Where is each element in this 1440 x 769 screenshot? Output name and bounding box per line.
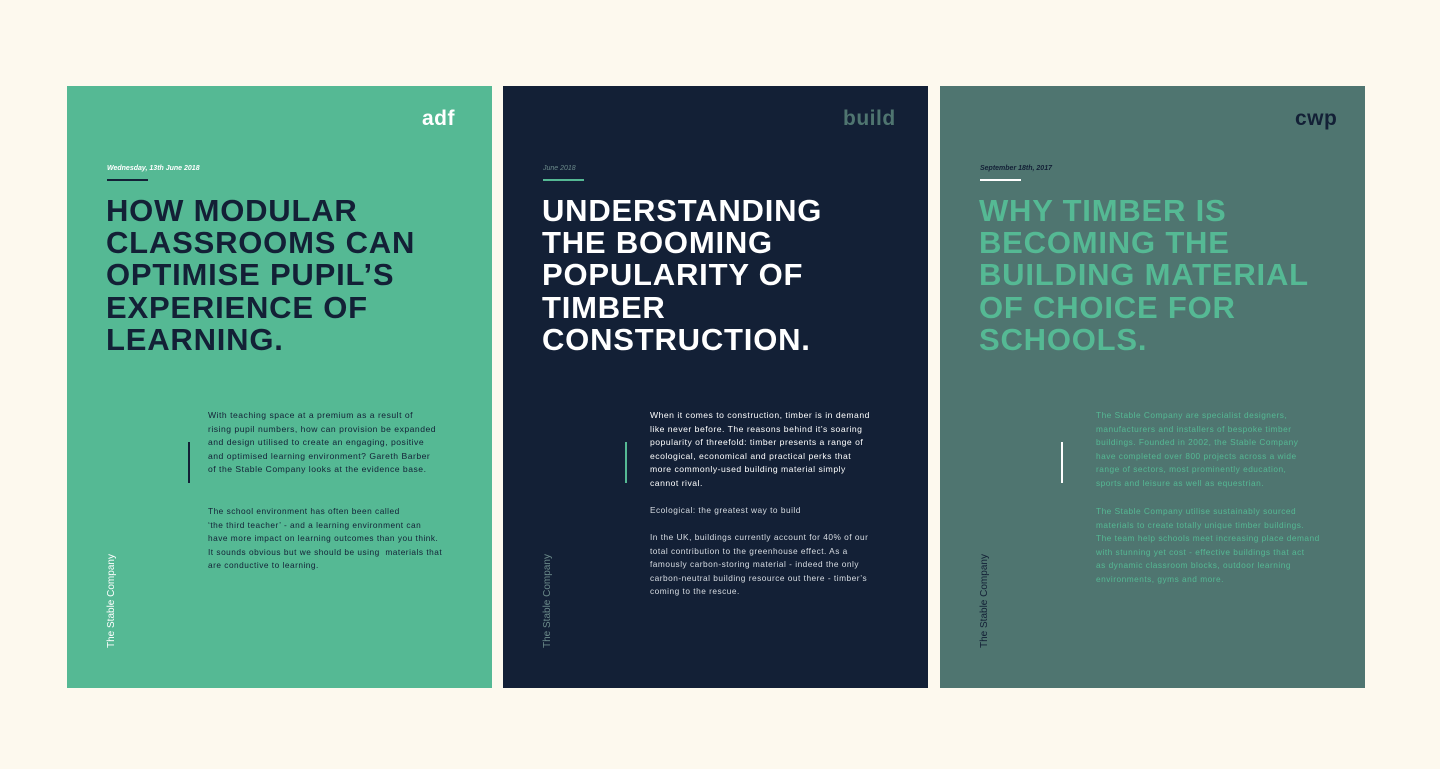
intro text: range of sectors, most prominently education, bbox=[1096, 464, 1286, 474]
title: POPULARITY OF bbox=[542, 257, 803, 292]
body text bbox=[1096, 506, 1320, 584]
accent bar bbox=[1061, 442, 1063, 483]
body text: carbon-neutral building resource out there - timber’s bbox=[650, 573, 867, 583]
intro text: of the Stable Company looks at the evidence base. bbox=[208, 464, 426, 474]
body text: have more impact on learning outcomes than you think. bbox=[208, 533, 438, 543]
title: OPTIMISE PUPIL’S bbox=[106, 257, 394, 292]
subheading: Ecological: the greatest way to build bbox=[650, 505, 801, 515]
body text: as dynamic classroom blocks, outdoor learning bbox=[1096, 560, 1291, 570]
title bbox=[979, 193, 1309, 357]
title: BUILDING MATERIAL bbox=[979, 257, 1309, 292]
date: Wednesday, 13th June 2018 bbox=[107, 165, 200, 172]
intro text: have completed over 800 projects across a wide bbox=[1096, 451, 1297, 461]
title: LEARNING. bbox=[106, 322, 284, 357]
body text: famously carbon-storing material - indeed the only bbox=[650, 559, 859, 569]
intro text: With teaching space at a premium as a result of bbox=[208, 410, 413, 420]
vertical label: The Stable Company bbox=[106, 554, 117, 648]
intro text: manufacturers and installers of bespoke timber bbox=[1096, 424, 1291, 434]
title bbox=[106, 193, 415, 357]
body text: In the UK, buildings currently account for 40% of our bbox=[650, 532, 868, 542]
title: WHY TIMBER IS bbox=[979, 193, 1227, 228]
intro text: cannot rival. bbox=[650, 478, 703, 488]
title: TIMBER bbox=[542, 290, 666, 325]
panel: cwp bbox=[940, 86, 1365, 688]
intro text bbox=[1096, 410, 1298, 488]
body text: environments, gyms and more. bbox=[1096, 574, 1224, 584]
panel: adf bbox=[67, 86, 492, 688]
body text: materials to create totally unique timber buildings. bbox=[1096, 520, 1304, 530]
title: THE BOOMING bbox=[542, 225, 773, 260]
title: CONSTRUCTION. bbox=[542, 322, 811, 357]
intro text: sports and leisure as well as equestrian. bbox=[1096, 478, 1264, 488]
accent bar bbox=[625, 442, 627, 483]
body text bbox=[208, 506, 442, 570]
title: OF CHOICE FOR bbox=[979, 290, 1236, 325]
body text: with stunning yet cost - effective buildings that act bbox=[1096, 547, 1305, 557]
intro text: like never before. The reasons behind it’s soaring bbox=[650, 424, 862, 434]
intro text: buildings. Founded in 2002, the Stable Company bbox=[1096, 437, 1298, 447]
date: June 2018 bbox=[543, 165, 576, 172]
title bbox=[542, 193, 822, 357]
logo: adf: adf bbox=[422, 107, 455, 130]
intro text: popularity of threefold: timber presents a range of bbox=[650, 437, 863, 447]
body text: The Stable Company utilise sustainably sourced bbox=[1096, 506, 1296, 516]
logo: cwp: cwp bbox=[1295, 107, 1337, 130]
title: SCHOOLS. bbox=[979, 322, 1147, 357]
logo: build: build bbox=[843, 107, 896, 130]
date: September 18th, 2017 bbox=[980, 165, 1052, 172]
body text bbox=[650, 532, 868, 596]
body text: are conductive to learning. bbox=[208, 560, 319, 570]
title: UNDERSTANDING bbox=[542, 193, 822, 228]
accent bar bbox=[188, 442, 190, 483]
intro text: more commonly-used building material simply bbox=[650, 464, 846, 474]
body text: The school environment has often been called bbox=[208, 506, 400, 516]
title: EXPERIENCE OF bbox=[106, 290, 368, 325]
vertical label: The Stable Company bbox=[542, 554, 553, 648]
intro text: When it comes to construction, timber is in demand bbox=[650, 410, 870, 420]
title: CLASSROOMS CAN bbox=[106, 225, 415, 260]
title: HOW MODULAR bbox=[106, 193, 358, 228]
body text: total contribution to the greenhouse effect. As a bbox=[650, 546, 848, 556]
intro text bbox=[208, 410, 436, 474]
title: BECOMING THE bbox=[979, 225, 1230, 260]
intro text: and optimised learning environment? Gareth Barber bbox=[208, 451, 430, 461]
body text: It sounds obvious but we should be using materials that bbox=[208, 547, 442, 557]
intro text: rising pupil numbers, how can provision be expanded bbox=[208, 424, 436, 434]
panel: build bbox=[503, 86, 928, 688]
vertical label: The Stable Company bbox=[979, 554, 990, 648]
intro text: ecological, economical and practical perks that bbox=[650, 451, 851, 461]
intro text: The Stable Company are specialist designers, bbox=[1096, 410, 1287, 420]
body text: ‘the third teacher’ - and a learning environment can bbox=[208, 520, 421, 530]
body text: The team help schools meet increasing place demand bbox=[1096, 533, 1320, 543]
intro text bbox=[650, 410, 870, 488]
body text: coming to the rescue. bbox=[650, 586, 740, 596]
intro text: and design utilised to create an engaging, positive bbox=[208, 437, 424, 447]
